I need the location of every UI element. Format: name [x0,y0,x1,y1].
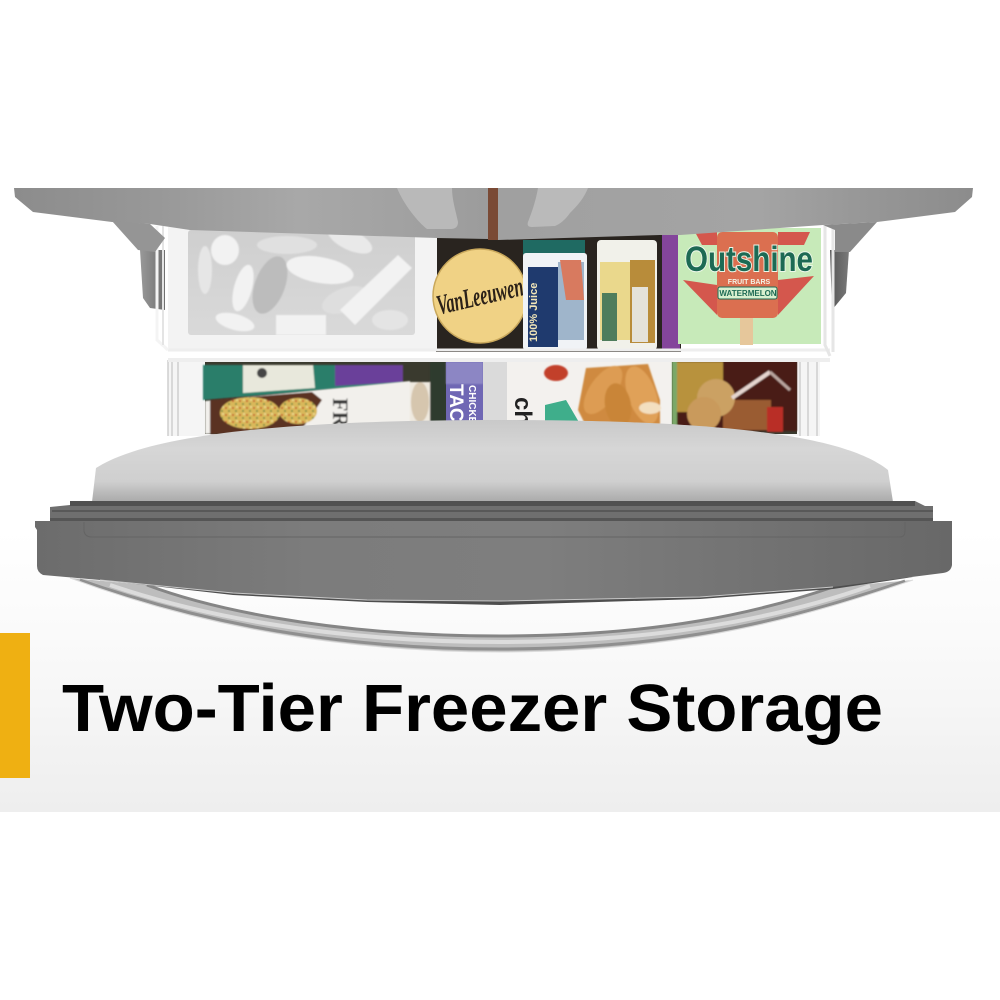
package: breaded chicken box [507,360,672,432]
right refrigerator door [498,188,973,252]
center food gap [488,188,498,240]
Outshine box: WATERMELON [719,289,777,298]
background band [0,188,1000,812]
Outshine box [678,228,821,345]
juice can [523,240,587,350]
purple box [662,235,680,350]
lemonade can [597,240,657,350]
door handle [397,188,458,229]
wire rails left and right [168,360,817,436]
door hinge [112,221,165,252]
yellow accent bar [0,633,30,778]
door hinge [823,222,877,252]
drawer handle [70,578,913,652]
left lower hinge [140,250,165,310]
package: cookies bag [672,361,797,432]
package: chicken tacos box: TAC [445,384,466,422]
ice cubes [198,221,412,335]
gasket [50,501,933,521]
freezer drawer [157,221,833,436]
door handle [528,188,588,227]
pale box [483,362,507,424]
Van Leeuwen lid [433,249,527,343]
package: breaded chicken box: ch. [509,397,536,432]
drawer front [35,501,952,605]
wire shelf rail [157,226,833,360]
upper basket [157,221,833,360]
package: chicken tacos box: CHICKE [466,385,477,424]
Outshine box: Outshine [685,240,813,279]
Van Leeuwen lid: VanLeeuwen [434,271,526,321]
left refrigerator door [14,188,488,252]
lower basket [168,358,820,436]
drawer lid top [92,420,893,502]
package: frozen meal box: FR [328,398,353,428]
ice bin [168,221,437,349]
package: chicken tacos box [445,362,483,424]
right lower hinge [830,250,849,310]
package: green and purple box [203,365,403,400]
Outshine box: FRUIT BARS [728,279,771,286]
title: Two-Tier Freezer Storage [62,671,883,746]
juice can: 100% Juice [528,283,540,342]
package: frozen meal box [205,362,446,434]
